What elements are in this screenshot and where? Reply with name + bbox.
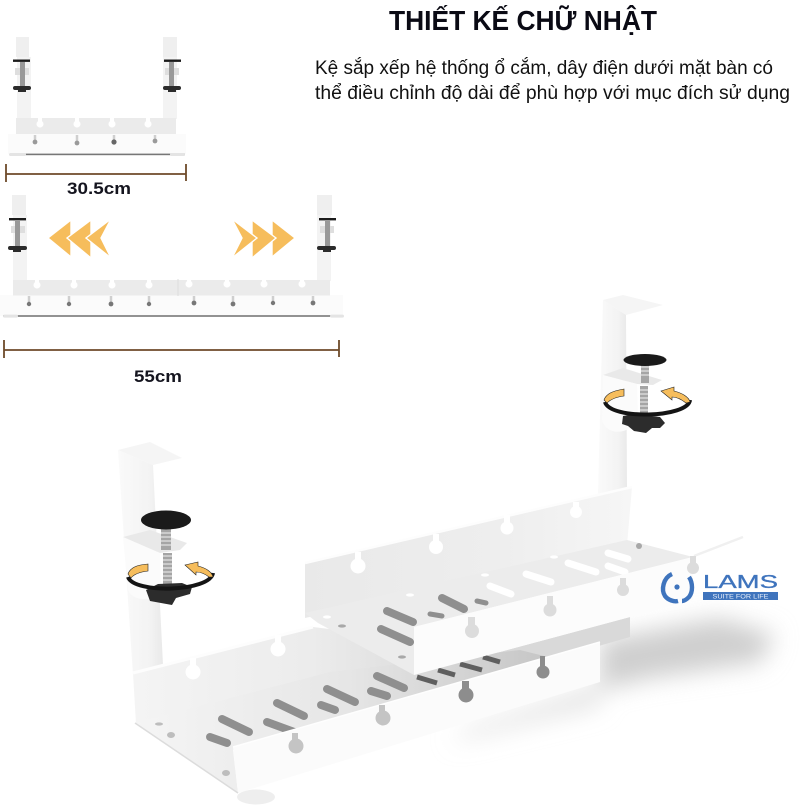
logo tagline: SUITE FOR LIFE [712,594,769,600]
floor [305,540,693,675]
clamp plate [603,368,662,385]
keyholes on upper tray [350,502,699,638]
description text [315,57,790,104]
front wall [233,642,600,793]
gap shade beneath upper tray [414,617,630,680]
dimension label 30.5cm: 30.5cm [67,179,131,198]
title: THIẾT KẾ CHỮ NHẬT [389,5,657,36]
logo mark [663,574,692,601]
rotation ring [128,573,213,589]
LAMS logo [663,572,778,601]
dimension line 30.5cm [6,164,186,182]
logo wordmark: LAMS [703,572,778,592]
small rack, collapsed length [8,37,186,156]
screw [641,363,649,383]
lower tray [118,442,630,804]
foot [237,790,275,804]
floor shadow [450,618,775,742]
dimension line 55cm [4,340,339,358]
keyholes on lower tray [186,635,550,754]
right stand [598,295,663,495]
right clamp [602,354,690,433]
description text: thể điều chỉnh độ dài để phù hợp với mục đích sử dụng [315,83,790,104]
back wall [305,487,632,618]
screw holes [155,722,230,776]
left stand [118,442,182,675]
arrows pointing right [232,219,295,258]
dimension label 55cm: 55cm [134,367,182,386]
front wall [414,557,693,675]
slots [381,598,486,642]
knob [622,414,665,433]
description text: Kệ sắp xếp hệ thống ổ cắm, dây điện dưới mặt bàn có [315,57,773,79]
upper tray [305,295,743,675]
floor [135,650,560,793]
arrows pointing left [48,219,111,258]
rotation arrows [128,564,148,578]
disc [141,510,191,530]
back wall [133,627,430,724]
screw [161,528,171,550]
screw holes [338,543,642,659]
logo tagline bar [703,592,778,600]
rotation arrows [604,389,624,403]
rotation ring [605,400,690,415]
disc [624,354,666,366]
left clamp [123,510,213,605]
clamp plate [123,530,187,553]
extended rack, full length [0,195,344,318]
slots [210,676,404,743]
knob [146,583,192,605]
